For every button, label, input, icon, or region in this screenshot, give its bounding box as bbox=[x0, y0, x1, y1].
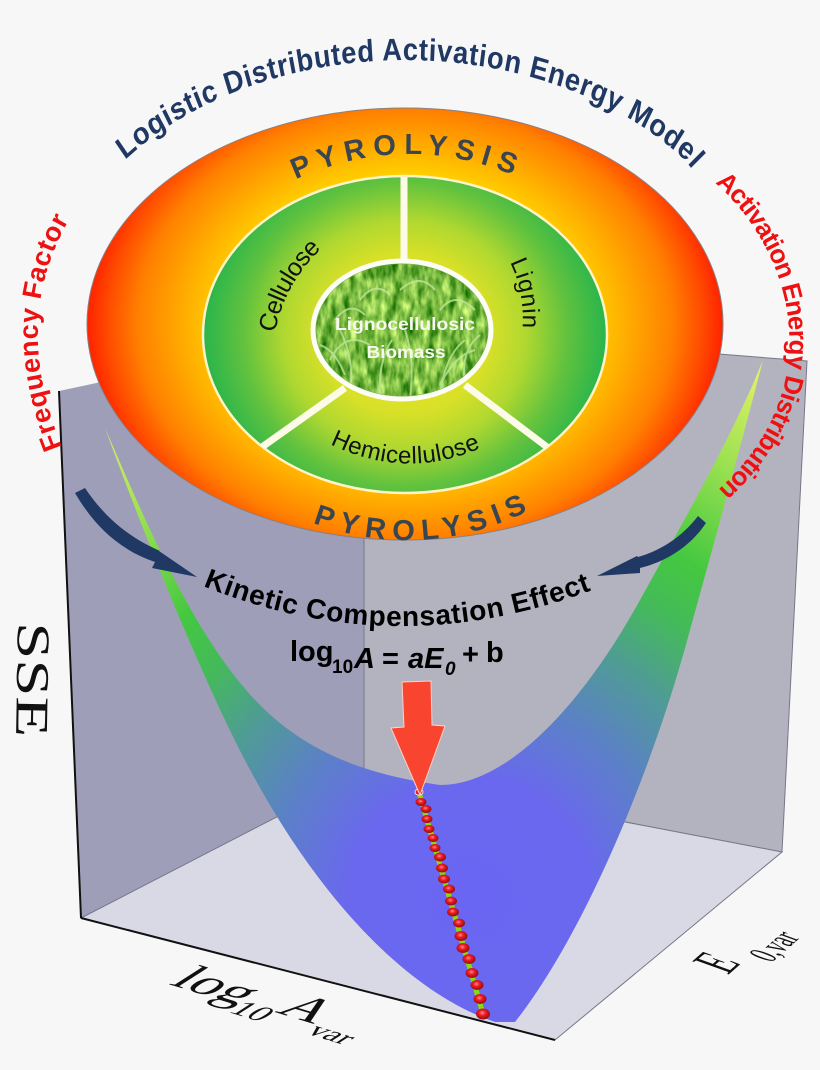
axis label: E 0,var: 0,var bbox=[739, 926, 809, 966]
center label: Lignocellulosic bbox=[335, 314, 475, 334]
label: bottom PYROLYSIS: PYROLYSIS bbox=[314, 496, 525, 540]
axis label: E 0,var: E bbox=[679, 946, 755, 980]
equation: log bbox=[290, 636, 334, 668]
heading: Kinetic Compensation Effect: Kinetic Compensation Effect bbox=[204, 568, 591, 632]
3D plot box bbox=[59, 326, 807, 1040]
right wall bbox=[364, 326, 807, 852]
green biomass ring bbox=[203, 176, 607, 493]
equation: + bbox=[462, 639, 479, 671]
equation: aE bbox=[408, 643, 445, 675]
center label bbox=[335, 314, 475, 362]
pyrolysis disc bbox=[86, 108, 724, 540]
label: Frequency Factor: Frequency Factor bbox=[22, 213, 66, 452]
center label: Biomass bbox=[366, 342, 446, 362]
equation: 0 bbox=[445, 659, 456, 680]
axis label: log10 A var: log bbox=[158, 959, 277, 1012]
arrow: red pointing to minimum bbox=[391, 681, 445, 795]
axis label: log10 A var: 10 bbox=[221, 997, 284, 1026]
front floor axis edge bbox=[81, 918, 555, 1040]
floor bbox=[81, 772, 782, 1040]
axis label: SSE: SSE bbox=[5, 622, 59, 738]
axis label: log10 A var: var bbox=[299, 1019, 365, 1049]
title: Logistic Distributed Activation Energy Model bbox=[114, 38, 706, 168]
label: Hemicellulose: Hemicellulose bbox=[332, 430, 478, 464]
equation: b bbox=[486, 637, 504, 669]
arrow: left navy curved bbox=[75, 488, 197, 577]
ring spokes bbox=[262, 177, 547, 447]
axis label: log10 A var: A bbox=[265, 987, 353, 1030]
label: Cellulose: Cellulose bbox=[260, 242, 319, 330]
parabolic SSE surface bbox=[105, 360, 763, 1022]
grass photo ellipse bbox=[310, 260, 494, 400]
outer orange disc bbox=[87, 108, 723, 540]
label: Activation Energy Distribution: Activation Energy Distribution bbox=[716, 174, 804, 498]
arrow: right navy curved bbox=[597, 516, 706, 576]
equation: 10 bbox=[332, 657, 353, 678]
label: Lignin: Lignin bbox=[510, 257, 540, 326]
left wall axis edge bbox=[59, 391, 81, 918]
equation: = bbox=[382, 643, 399, 675]
equation: A bbox=[353, 643, 375, 675]
label: top PYROLYSIS: PYROLYSIS bbox=[290, 134, 517, 178]
minimum line with red data beads bbox=[415, 789, 490, 1020]
left wall bbox=[59, 326, 364, 918]
